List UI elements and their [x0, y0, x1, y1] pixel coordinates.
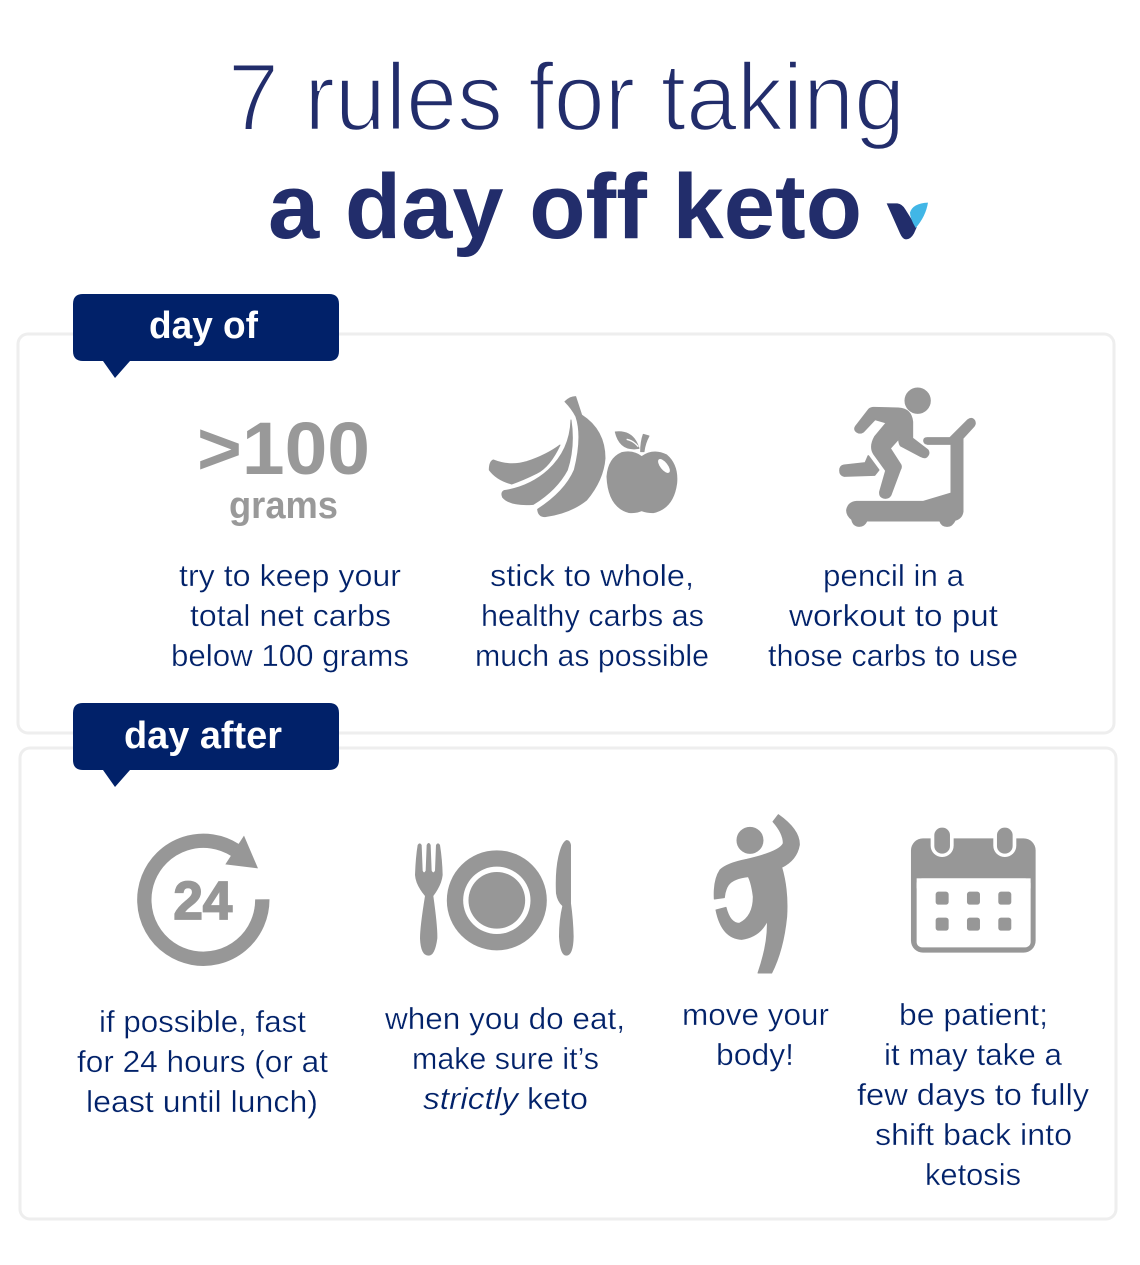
heading: day of tab [73, 294, 339, 378]
text: patience rule: it may take a [884, 1037, 1063, 1072]
text: net carbs rule: below 100 grams [171, 638, 409, 673]
text: net carbs rule: try to keep your [179, 558, 401, 593]
text: workout rule: pencil in a [823, 558, 965, 593]
text: patience rule [857, 997, 1090, 1192]
heading: day after tab: day after [124, 715, 282, 757]
text: fasting rule [77, 1004, 328, 1119]
text: move rule: move your [682, 997, 829, 1032]
text: patience rule: ketosis [925, 1157, 1021, 1192]
icon: greater than 100 grams: grams [229, 485, 338, 527]
text: net carbs rule [171, 558, 409, 673]
heading: day after tab [73, 703, 339, 787]
icon: 24 hour clock arrow: 24 [173, 872, 233, 931]
heading: day of tab: day of [149, 305, 258, 347]
text: workout rule [768, 558, 1018, 673]
icon: dancing figure [714, 815, 799, 973]
text: strictly keto rule: when you do eat, [384, 1001, 625, 1036]
text: workout rule: workout to put [788, 598, 998, 633]
text: whole carbs rule: healthy carbs as [481, 598, 704, 633]
text: strictly keto rule [384, 1001, 625, 1116]
text: fasting rule: if possible, fast [99, 1004, 306, 1039]
text: patience rule: few days to fully [857, 1077, 1090, 1112]
icon: fork plate and knife [415, 840, 574, 956]
text: strictly keto rule: keto [527, 1081, 588, 1116]
text: net carbs rule: total net carbs [190, 598, 391, 633]
icon: banana and apple [489, 397, 677, 517]
icon: brand logo [887, 203, 928, 239]
text: fasting rule: least until lunch) [86, 1084, 318, 1119]
text: patience rule: be patient; [899, 997, 1048, 1032]
text: move rule: body! [716, 1037, 794, 1072]
text: workout rule: those carbs to use [768, 638, 1018, 673]
icon: calendar [911, 826, 1036, 953]
icon: greater than 100 grams [197, 407, 370, 527]
title: 7 rules for taking [228, 44, 905, 151]
title: a day off keto [268, 156, 862, 258]
text: fasting rule: for 24 hours (or at [77, 1044, 328, 1079]
icon: treadmill runner [840, 388, 975, 526]
title [228, 44, 905, 258]
text: whole carbs rule: stick to whole, [490, 558, 694, 593]
icon: greater than 100 grams: >100 [197, 407, 370, 490]
icon: 24 hour clock arrow [144, 836, 262, 959]
text: whole carbs rule [475, 558, 709, 673]
text: whole carbs rule: much as possible [475, 638, 709, 673]
text: strictly keto rule: strictly [423, 1081, 521, 1116]
panel: day after [20, 748, 1116, 1219]
text: strictly keto rule: make sure it’s [412, 1041, 599, 1076]
panel: day of [18, 334, 1114, 733]
text: move rule [682, 997, 829, 1072]
text: patience rule: shift back into [875, 1117, 1072, 1152]
